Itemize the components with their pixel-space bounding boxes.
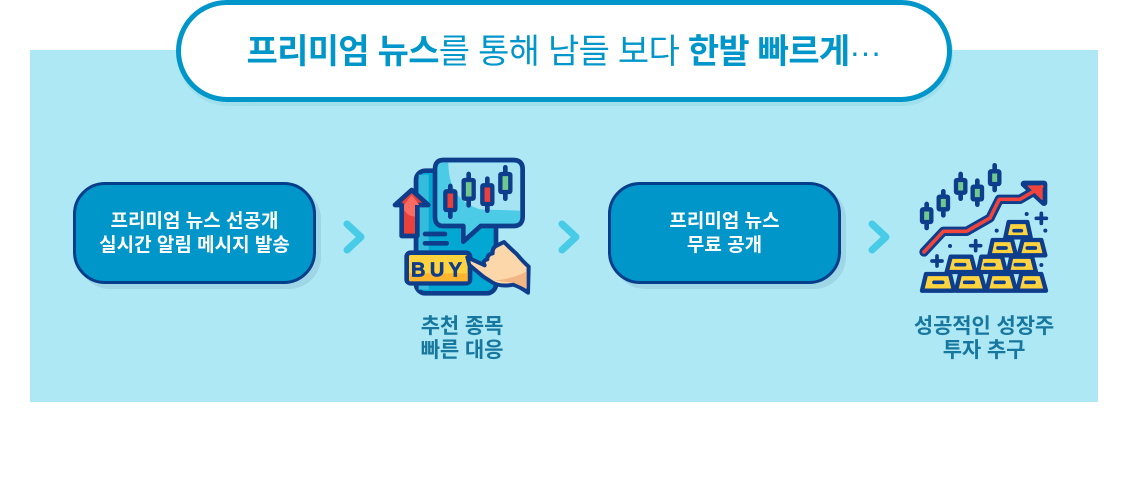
icon: buy signal on phone	[392, 158, 531, 296]
icon part: sparkles	[932, 212, 1047, 267]
icon part: rising arrow	[924, 184, 1044, 252]
box: step 1	[73, 182, 316, 284]
icon part: candles	[922, 165, 999, 228]
box: step 3	[608, 182, 841, 284]
icon part: buy button	[407, 253, 470, 283]
panel: background	[30, 50, 1098, 402]
caption: step 2: 빠른 대응	[421, 339, 503, 362]
box: step 3: 프리미엄 뉴스	[669, 211, 780, 232]
arrow: step 2 to 3	[558, 220, 580, 254]
caption: step 4	[914, 315, 1054, 362]
box: step 1: 프리미엄 뉴스 선공개	[111, 211, 278, 232]
icon part: up arrow	[395, 190, 428, 236]
title pill: 프리미엄 뉴스를 통해 남들 보다 한발 빠르게···	[247, 33, 881, 71]
arrow: step 3 to 4	[868, 220, 890, 254]
icon part: pointing hand	[467, 242, 529, 293]
caption: step 2: 추천 종목	[421, 315, 503, 338]
title pill	[176, 0, 952, 102]
icon part: gold bars	[922, 222, 1046, 291]
icon part: buy button: BUY	[411, 260, 466, 282]
caption: step 4: 투자 추구	[943, 339, 1025, 362]
caption: step 4: 성공적인 성장주	[914, 315, 1054, 338]
box: step 3: 무료 공개	[687, 235, 762, 256]
caption: step 2	[421, 315, 503, 362]
box: step 1: 실시간 알림 메시지 발송	[99, 235, 290, 256]
icon: gold bars and rising chart	[919, 163, 1048, 293]
arrow: step 1 to 2	[344, 220, 364, 254]
